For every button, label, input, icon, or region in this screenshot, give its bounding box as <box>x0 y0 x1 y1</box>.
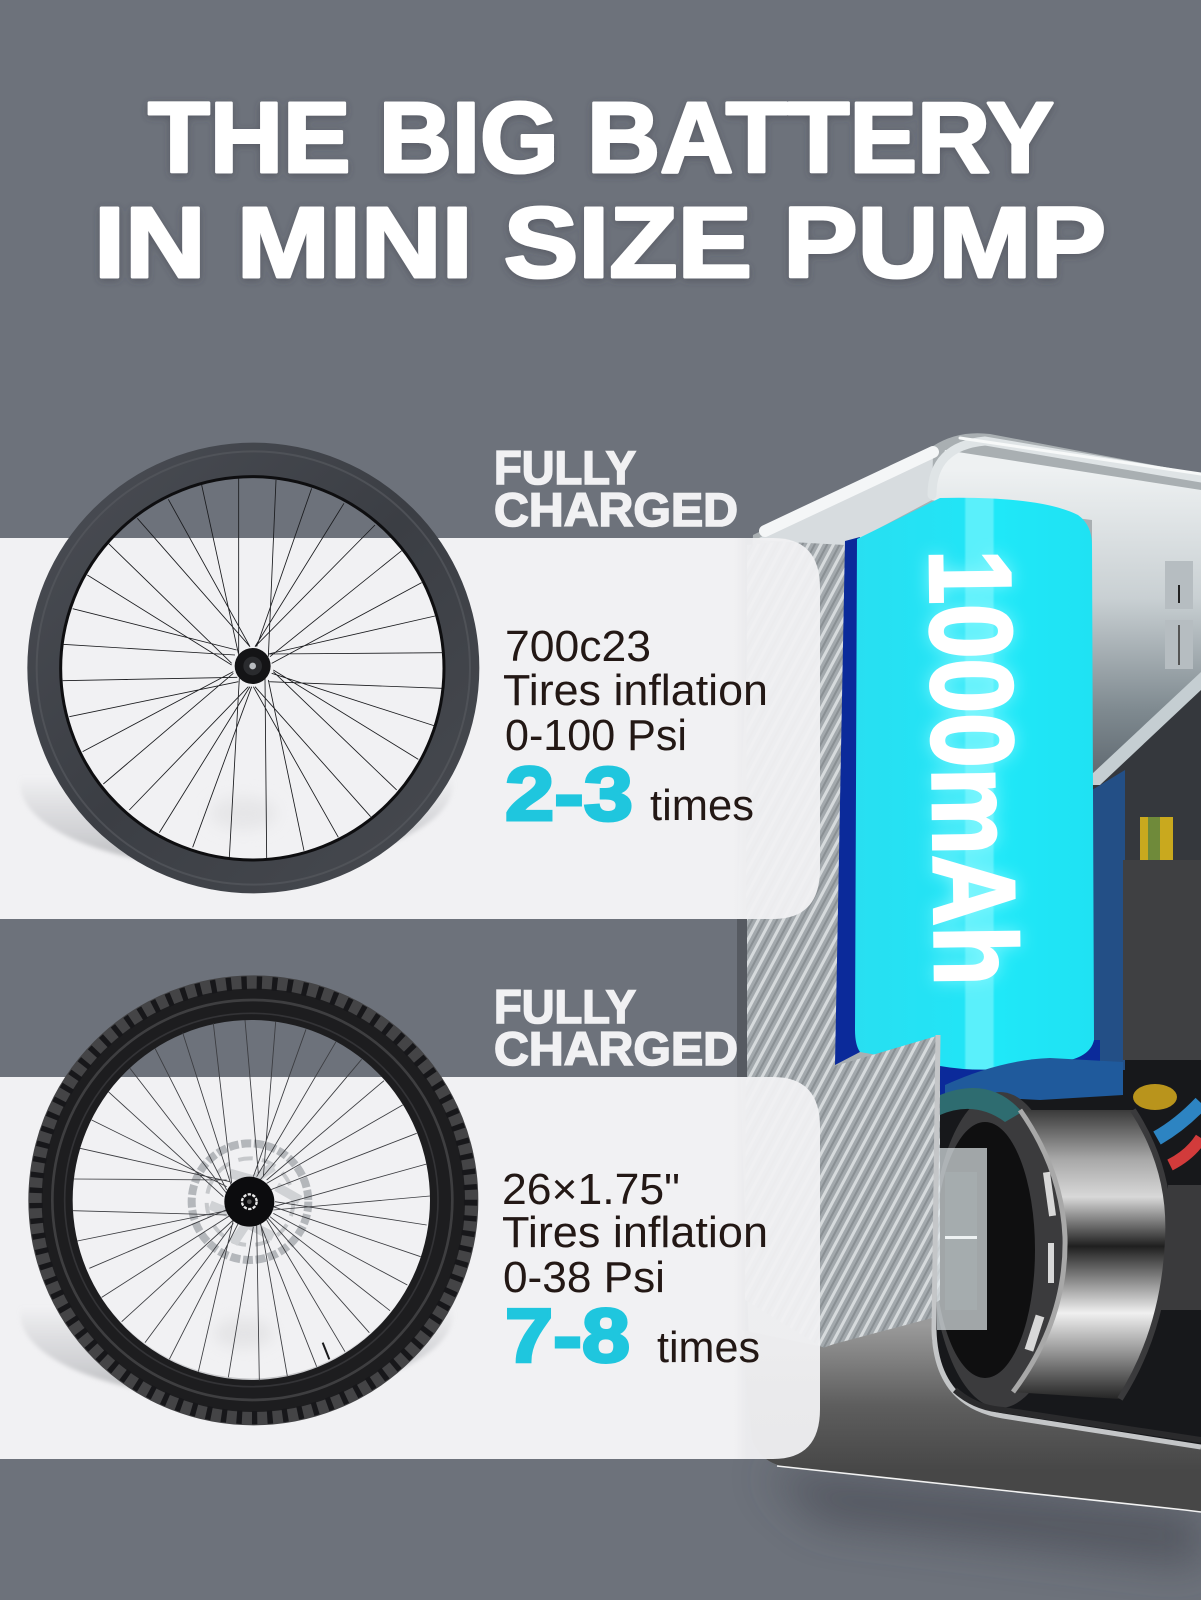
capacity text: 1000mAh <box>905 549 1040 986</box>
pump cutaway illustration <box>737 433 1201 1565</box>
panel: road bike info <box>0 538 820 919</box>
gold pin <box>1140 817 1173 860</box>
text block: mountain bike specs <box>502 1165 768 1372</box>
title: IN MINI SIZE PUMP <box>94 187 1106 299</box>
motor silver cylinder <box>1013 1110 1168 1399</box>
clear top shell surface <box>755 452 933 545</box>
stat: 7-8 times: 7-8 <box>505 1294 630 1379</box>
lower metal base <box>741 1318 1201 1512</box>
text block: road bike specs: 0-100 Psi <box>505 711 687 760</box>
battery cell <box>855 498 1094 1070</box>
pump ground shadow <box>765 1470 1201 1565</box>
knobby tread <box>35 982 472 1419</box>
rim <box>61 477 444 860</box>
diagonal plate <box>1092 672 1201 785</box>
valve <box>323 1343 329 1359</box>
road bike wheel <box>20 443 479 893</box>
mountain bike wheel <box>20 977 477 1423</box>
spokes <box>63 478 443 858</box>
capacity text glow: 1000mAh <box>905 549 1040 986</box>
panel: mountain bike info <box>0 1077 820 1459</box>
text block: mountain bike specs: Tires inflation <box>502 1208 768 1257</box>
base highlight line <box>777 1466 1201 1512</box>
label: fully charged, mountain bike: CHARGED <box>494 1022 738 1075</box>
faint inner reflection <box>210 797 277 830</box>
lower interior <box>932 690 1201 1447</box>
hatched translucent shell <box>745 535 940 1348</box>
spokes <box>73 1020 430 1381</box>
housing top edge <box>765 438 1201 531</box>
text block: road bike specs <box>503 622 768 830</box>
mid interior wall <box>1092 690 1201 1060</box>
text block: mountain bike specs: 26×1.75" <box>502 1165 680 1214</box>
dark capacitor cylinder <box>1123 860 1201 1060</box>
red and blue wires <box>1157 1103 1201 1165</box>
hub <box>224 1177 274 1227</box>
shell left shadow band <box>737 919 747 1077</box>
interior switch blocks <box>1165 561 1193 669</box>
title <box>94 82 1106 299</box>
pump housing body <box>738 433 1201 1512</box>
motor inner opening <box>935 1122 1035 1378</box>
wheel interior floor <box>79 750 426 860</box>
upper right interior <box>930 450 1201 800</box>
stat: 2-3 times: 2-3 <box>505 752 633 837</box>
blue interior wall <box>1092 770 1125 1070</box>
motor ring edge <box>1013 1110 1065 1392</box>
hatched shell front flap <box>823 1035 940 1348</box>
text block: mountain bike specs: 0-38 Psi <box>503 1253 665 1302</box>
label: fully charged, road bike: CHARGED <box>494 483 738 536</box>
lower rim shadow <box>955 1390 1201 1440</box>
tire <box>27 443 479 893</box>
label: fully charged, road bike <box>494 441 738 536</box>
opening rim <box>934 1035 1201 1447</box>
tire sidewall ring <box>52 1000 452 1400</box>
wheel shadow <box>20 1228 453 1398</box>
clear plastic clip <box>937 1148 987 1330</box>
faint inner reflection <box>213 1318 273 1348</box>
wheel shadow <box>20 698 453 868</box>
label: fully charged, road bike: FULLY <box>494 441 636 494</box>
tire tread line <box>37 451 470 885</box>
battery back panel <box>835 537 1100 1100</box>
motor ring notches <box>1025 1172 1056 1352</box>
text block: mountain bike specs: times <box>657 1323 760 1372</box>
text block: road bike specs: Tires inflation <box>503 666 768 715</box>
motor end ring <box>932 1092 1068 1408</box>
label: fully charged, mountain bike <box>494 980 738 1075</box>
hub <box>235 648 271 684</box>
text block: road bike specs: times <box>650 781 754 830</box>
tire body <box>30 977 477 1423</box>
tread blocks <box>36 983 471 1418</box>
wheel interior floor <box>92 1280 411 1378</box>
rim highlight <box>65 1013 438 1387</box>
gold terminal <box>1133 1084 1177 1110</box>
label: fully charged, mountain bike: FULLY <box>494 980 636 1033</box>
blue mounting plate <box>945 1058 1123 1100</box>
motor teal highlight <box>940 1088 1022 1122</box>
text block: road bike specs: 700c23 <box>505 622 651 671</box>
motor right end <box>1160 1185 1201 1310</box>
disc brake rotor <box>192 1143 308 1260</box>
title: THE BIG BATTERY <box>148 82 1054 194</box>
motor right edge <box>1120 1110 1168 1399</box>
